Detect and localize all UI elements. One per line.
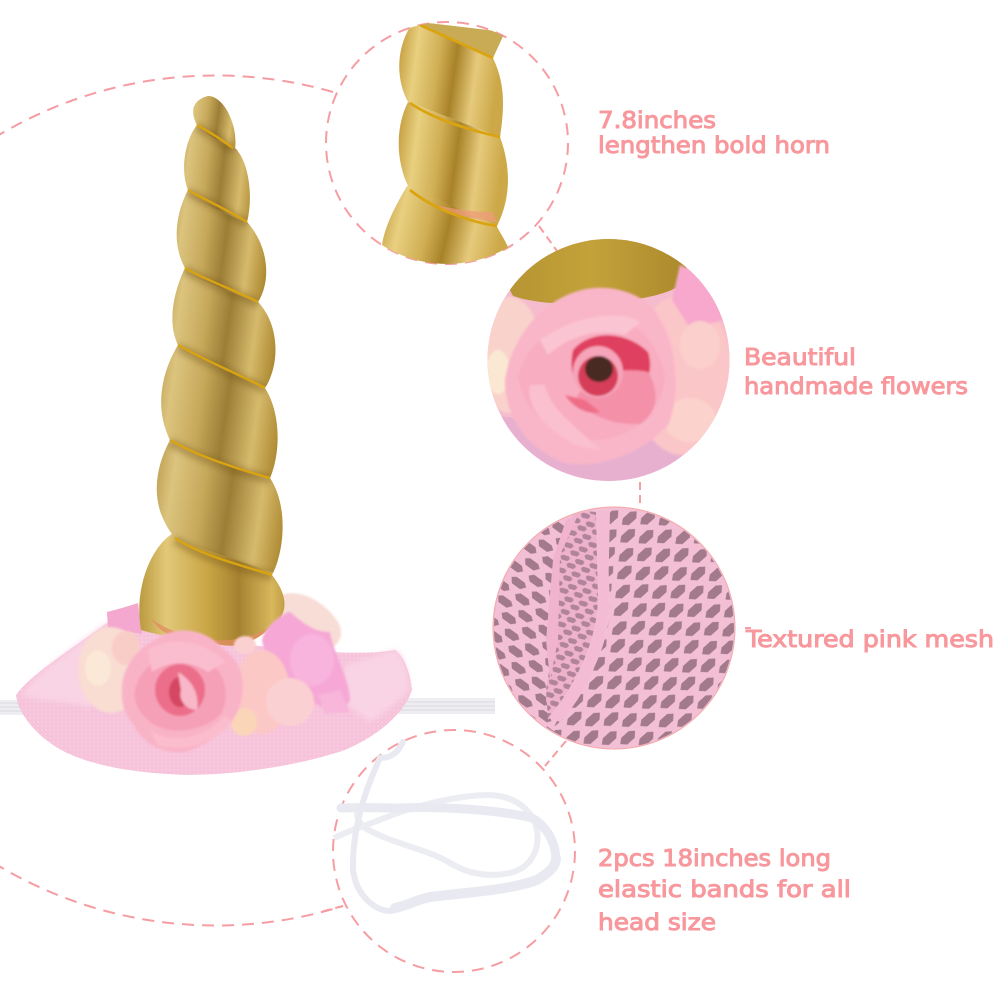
gold fabric	[510, 239, 686, 304]
label: flowers	[744, 345, 968, 400]
circle: horn close-up	[326, 22, 568, 270]
connector: mesh circle to band circle	[545, 741, 566, 766]
large dashed circle around the horn	[0, 76, 343, 926]
back pink flower	[107, 603, 142, 634]
label: flowers: Beautiful	[744, 345, 856, 371]
left mesh panel	[494, 522, 564, 732]
back cream flower	[280, 593, 341, 651]
tick beside mesh circle	[745, 627, 751, 629]
elastic band behind tulle	[0, 698, 495, 715]
label: horn	[598, 108, 830, 159]
dashed ring	[326, 22, 568, 264]
left flower	[488, 296, 534, 413]
horn close-up rope	[410, 25, 500, 226]
horn rope	[170, 125, 272, 575]
dashed ring	[333, 730, 575, 972]
light fold strip	[548, 510, 610, 722]
circle: flowers close-up	[488, 239, 730, 481]
horn	[139, 96, 284, 646]
label: elastic bands: elastic bands for all	[598, 877, 851, 903]
label: flowers: handmade flowers	[744, 374, 968, 400]
right pink flower	[262, 612, 350, 714]
label: elastic bands	[598, 846, 851, 936]
label: elastic bands: head size	[598, 910, 716, 936]
label: horn: 7.8inches	[598, 108, 716, 134]
main rose	[122, 631, 243, 752]
peach flower	[231, 636, 314, 736]
large rose	[505, 288, 676, 464]
orange reflection on horn base	[150, 618, 268, 646]
upper tulle highlight	[22, 623, 409, 722]
connector: horn circle to flower circle	[539, 226, 557, 251]
connector: band circle to large circle	[320, 906, 343, 912]
connector: flower circle to mesh circle	[639, 482, 641, 507]
unicorn headband	[16, 90, 412, 775]
label: horn: lengthen bold horn	[598, 133, 830, 159]
band one	[341, 742, 556, 911]
circle: mesh close-up	[490, 505, 740, 755]
lilac mesh	[502, 416, 702, 481]
label: elastic bands: 2pcs 18inches long	[598, 846, 831, 872]
central mesh fold	[546, 510, 598, 720]
right flower	[652, 264, 730, 456]
circle: elastic bands close-up	[333, 730, 575, 972]
left peach flower	[78, 627, 144, 713]
left fold strip	[546, 515, 578, 680]
shadows along rope	[170, 127, 272, 577]
band two	[334, 795, 538, 875]
tulle base	[16, 623, 412, 775]
right mesh panel	[554, 510, 734, 746]
label: mesh: Textured pink mesh	[745, 627, 994, 653]
